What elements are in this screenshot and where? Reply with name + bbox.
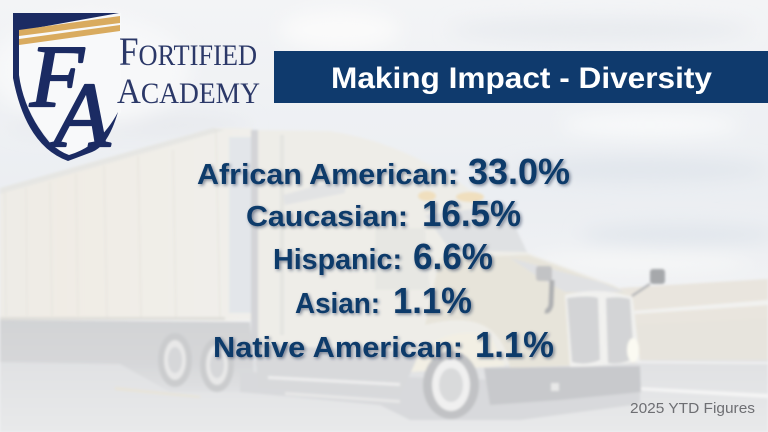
logo wordmark [117,29,260,111]
ground [620,279,768,364]
cab sleeper and body [258,130,640,372]
logo: Fortified Academy [13,13,260,166]
stat: Hispanic: Hispanic: [273,244,402,276]
headlight [627,338,639,362]
stat: African American: African American: [197,159,458,191]
monogram [29,29,111,166]
stat: Caucasian: 16.5% [422,193,521,234]
trailer [0,128,252,321]
shield [13,13,121,161]
diversity statistics [197,151,570,365]
title banner [274,51,768,103]
stat: Hispanic: 6.6% [413,236,493,277]
wheels [158,333,479,419]
stat: Asian: 1.1% [393,280,472,321]
title: Making Impact - Diversity [331,62,712,95]
fuel tank and step [255,345,420,396]
hood [425,255,636,368]
under trailer shadow [0,320,255,392]
stat: Caucasian [246,193,521,234]
logo wordmark: FORTIFIED [119,29,257,74]
fender arc [410,333,505,372]
bumper [484,366,641,405]
stat: Native American [213,324,554,365]
windshield [425,205,527,252]
amber lights [418,191,436,201]
stat: African American: 33.0% [468,151,570,192]
stat: Native American: 1.1% [475,324,554,365]
stat: Asian [295,280,472,321]
stat: Asian: Asian: [295,288,380,320]
stat: Caucasian: Caucasian: [246,201,408,233]
mirrors [632,284,650,296]
stat: Hispanic [273,236,493,277]
stat: African American [197,151,570,192]
road [0,360,768,432]
grille [567,296,600,364]
monogram: F [29,29,85,126]
logo wordmark: ACADEMY [117,71,260,111]
monogram: A [48,64,111,166]
stat: Native American: Native American: [213,332,463,364]
footnote: 2025 YTD Figures [630,400,755,417]
